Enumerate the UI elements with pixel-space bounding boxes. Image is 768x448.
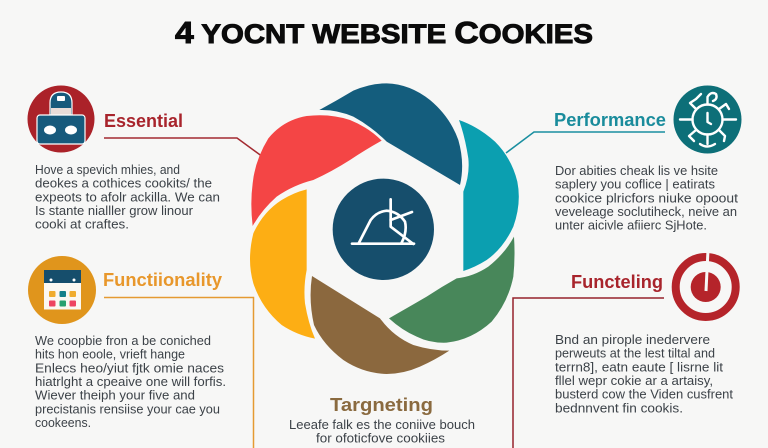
text: functionality body: cookeens.	[35, 416, 91, 430]
text: essential body: deokes a cothices cookits/ the	[35, 177, 212, 191]
panel: targeting	[289, 395, 475, 446]
text: functeling body	[555, 333, 734, 415]
panel: functionality	[28, 256, 226, 430]
connector: performance	[506, 132, 665, 153]
text: targeting body: Leeafe falk es the coniive bouch	[289, 418, 475, 432]
heading: functeling: Functeling	[571, 272, 663, 292]
icon: center cookie	[352, 199, 414, 244]
wheel segment: brown	[311, 276, 449, 374]
wheel segment: red	[251, 115, 382, 226]
panel: performance	[554, 86, 742, 233]
panel: functeling	[555, 250, 736, 415]
title: 4 YOCNT WEBSITE COOKIES	[175, 15, 593, 50]
text: performance body: unter aicivle afiierc SjHote.	[555, 219, 707, 233]
center badge	[333, 179, 434, 280]
text: functionality body: hiatrlght a cpeaive one will forfis.	[35, 375, 226, 389]
icon: functionality calendar	[28, 256, 96, 324]
heading: performance: Performance	[554, 110, 666, 130]
wheel segment: teal	[459, 120, 519, 271]
text: functeling body: bednnvent fin cookis.	[555, 401, 683, 415]
text: functeling body: terrn8], eatn eaute [ lisrne lit	[555, 360, 724, 374]
text: functeling body: busterd cow the Viden cusfrent	[555, 388, 734, 402]
icon: essential lock and case	[28, 86, 94, 152]
icon: functeling power dial	[676, 250, 736, 317]
text: essential body: expeots to afolr ackilla. We can	[35, 190, 220, 204]
text: performance body: cookice plricfors niuke opoout	[555, 191, 739, 205]
central cookie wheel	[250, 83, 519, 374]
panel: essential	[28, 86, 220, 232]
connector: functionality	[104, 298, 254, 448]
text: targeting body	[289, 418, 475, 446]
wheel segment: navy	[319, 83, 462, 185]
text: functeling body: fllel wepr cokie ar a artaisy,	[555, 374, 713, 388]
text: functionality body	[35, 334, 226, 430]
connector: functeling	[513, 298, 664, 448]
text: functionality body: precistanis rensiise your cae you	[35, 402, 220, 416]
text: essential body: cooki at craftes.	[35, 218, 129, 232]
heading: targeting: Targneting	[330, 395, 433, 415]
text: functeling body: perweuts at the lest tiltal and	[555, 347, 715, 361]
text: performance body: Dor abities cheak lis ve hsite	[555, 164, 718, 178]
text: functionality body: Enlecs heo/yiut fjtk omie naces	[35, 361, 224, 375]
text: functeling body: Bnd an pirople inedervere	[555, 333, 710, 347]
text: performance body	[555, 164, 739, 233]
text: functionality body: Wiever theiph your five and	[35, 389, 195, 403]
text: essential body: Hove a spevich mhies, and	[35, 163, 180, 177]
heading: functionality: Functiionality	[103, 270, 222, 290]
heading: essential: Essential	[104, 111, 183, 131]
text: targeting body: for ofoticfove cookiies	[316, 432, 445, 446]
text: functionality body: We coopbie fron a be coniched	[35, 334, 211, 348]
text: essential body	[35, 163, 220, 232]
wheel segment: yellow	[250, 189, 315, 339]
text: performance body: saplery you coflice | eatirats	[555, 178, 715, 192]
text: essential body: Is stante nialller grow linour	[35, 204, 193, 218]
connector: essential	[104, 138, 263, 157]
text: functionality body: hits hon eoole, vrieft hange	[35, 348, 185, 362]
text: performance body: veveleage soclutiheck, neive an	[555, 205, 737, 219]
wheel segment: green	[389, 237, 515, 343]
icon: performance gear clock	[674, 86, 742, 154]
